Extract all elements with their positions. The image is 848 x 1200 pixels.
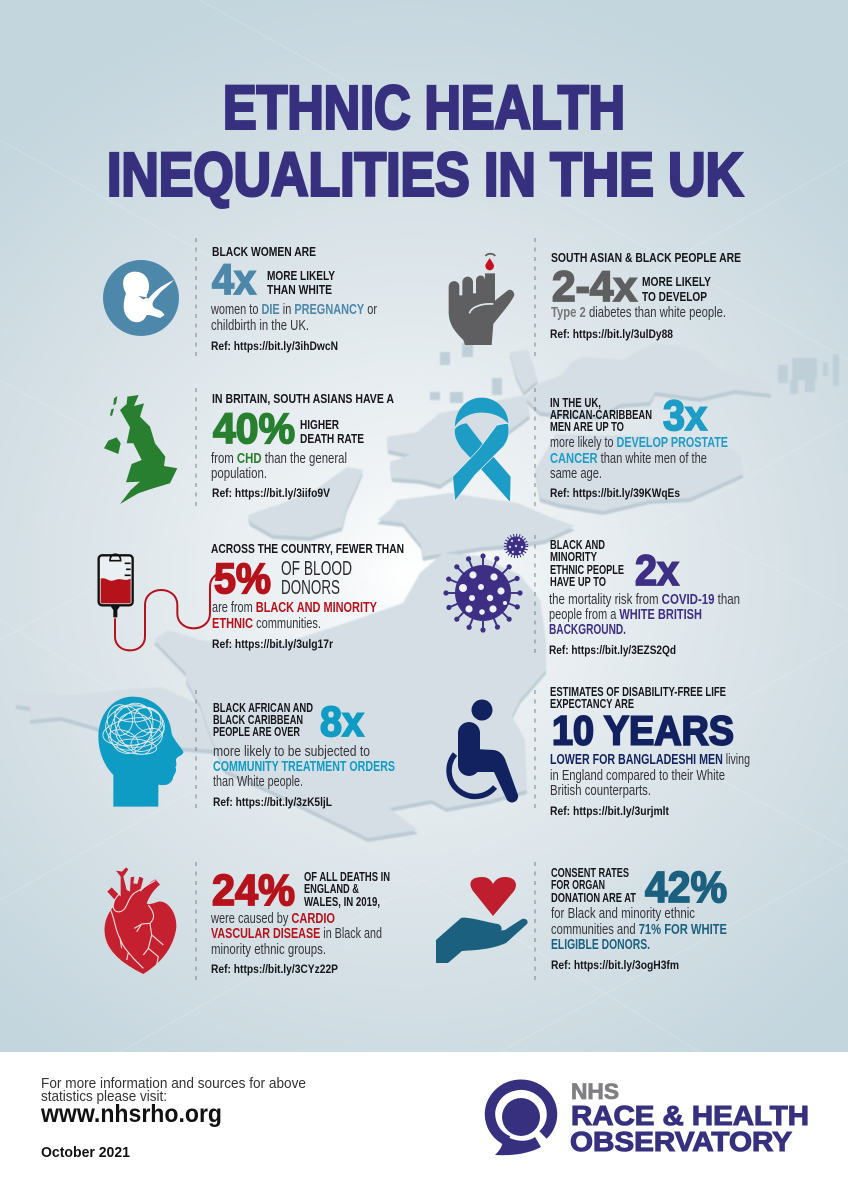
text: CHD [211, 391, 394, 500]
text: disability: in England compared to their White [550, 768, 725, 784]
panel: organ donation [436, 862, 727, 980]
footer text: For more information and sources for above [41, 1075, 306, 1092]
text: disability: British counterparts. [550, 783, 651, 799]
text: diabetes: Type 2 diabetes than white people. [551, 305, 726, 321]
text: covid: HAVE UP TO [550, 574, 606, 589]
panel: prostate cancer [453, 388, 728, 510]
text: diabetes: MORE LIKELY [642, 274, 711, 289]
text: covid [549, 537, 740, 657]
text: organ: FOR ORGAN [551, 877, 605, 892]
text: prostate: same age. [550, 466, 602, 482]
logo: NHS Race & Health Observatory: OBSERVATORY [570, 1126, 792, 1157]
icon: head with tangled thoughts [98, 696, 183, 807]
text: CTO: BLACK AFRICAN AND [213, 700, 313, 715]
footer text: www.nhsrho.org [40, 1100, 222, 1128]
text: cardio: WALES, IN 2019, [304, 894, 380, 909]
panel: covid-19 [443, 535, 740, 658]
text: cardio: 24% [212, 866, 295, 915]
text: disability: Ref: https://bit.ly/3urjmlt [550, 804, 669, 818]
text: donors: OF BLOOD [281, 558, 352, 580]
title: INEQUALITIES IN THE UK [107, 140, 743, 210]
text: prostate: more likely to DEVELOP PROSTATE [550, 435, 728, 451]
panel: community treatment orders [98, 690, 395, 812]
logo: NHS Race & Health Observatory [490, 1079, 809, 1157]
text: organ: for Black and minority ethnic [551, 906, 695, 922]
text: maternal: childbirth in the UK. [211, 318, 309, 334]
text: cardio: OF ALL DEATHS IN [304, 869, 390, 884]
text: organ: communities and 71% FOR WHITE [551, 922, 727, 938]
text: donors: Ref: https://bit.ly/3ulg17r [212, 637, 333, 651]
text: organ: 42% [645, 863, 727, 912]
text: CHD: DEATH RATE [300, 431, 364, 446]
panel: cardiovascular disease [105, 862, 390, 980]
text: covid: BLACK AND [550, 537, 605, 552]
text: donors [211, 541, 404, 651]
text: CTO: than White people. [213, 774, 303, 790]
text: cardio [210, 866, 390, 976]
text: CTO: Ref: https://bit.ly/3zK5ljL [213, 795, 332, 809]
text: CTO: COMMUNITY TREATMENT ORDERS [213, 759, 395, 775]
text: CHD: from CHD than the general [211, 451, 347, 467]
text: diabetes: SOUTH ASIAN & BLACK PEOPLE ARE [551, 250, 741, 265]
text: maternal: women to DIE in PREGNANCY or [210, 302, 377, 318]
icon: heart in hand [436, 877, 528, 963]
text: covid: ETHNIC PEOPLE [550, 562, 624, 577]
text: CTO: more likely to be subjected to [213, 744, 370, 760]
footer [0, 1052, 848, 1200]
text: CHD: 40% [213, 405, 295, 453]
text: diabetes: 2-4x [552, 263, 637, 311]
title [107, 74, 743, 210]
text: covid: MINORITY [550, 549, 597, 564]
icon: UK map [104, 395, 177, 504]
text: prostate [550, 392, 728, 500]
text: donors: DONORS [281, 577, 340, 599]
logo: NHS Race & Health Observatory: NHS [571, 1079, 619, 1104]
panel: disability-free life expectancy [449, 684, 750, 818]
text: prostate: AFRICAN-CARIBBEAN [550, 407, 652, 422]
text: maternal: 4x [212, 256, 256, 304]
text: maternal: BLACK WOMEN ARE [212, 244, 316, 259]
panel: CHD death rate [104, 388, 394, 510]
footer text: October 2021 [41, 1145, 130, 1161]
text: prostate: IN THE UK, [550, 395, 601, 410]
footer text: statistics please visit: [41, 1088, 167, 1105]
panel: maternal mortality [103, 238, 377, 358]
text: maternal [210, 244, 377, 353]
text: organ: ELIGIBLE DONORS. [551, 937, 650, 953]
text: covid: people from a WHITE BRITISH [549, 607, 702, 623]
text: disability [550, 684, 750, 818]
text: donors: ETHNIC communities. [212, 616, 321, 632]
icon: wheelchair user [449, 700, 518, 802]
icon: large virus [443, 553, 523, 633]
icon: awareness ribbon [453, 398, 511, 502]
text: donors: ACROSS THE COUNTRY, FEWER THAN [211, 541, 404, 556]
text: disability: ESTIMATES OF DISABILITY-FREE LIFE [550, 684, 726, 699]
text: covid: BACKGROUND. [549, 622, 626, 638]
text: cardio: Ref: https://bit.ly/3CYz22P [211, 962, 338, 976]
text: diabetes: Ref: https://bit.ly/3ulDy88 [550, 327, 673, 341]
text: disability: 10 YEARS [552, 708, 734, 754]
text: diabetes [550, 250, 741, 341]
icon: blood bag [99, 554, 219, 650]
text: diabetes: TO DEVELOP [642, 289, 707, 304]
text: cardio: minority ethnic groups. [211, 942, 326, 958]
text: donors: are from BLACK AND MINORITY [212, 600, 377, 616]
text: cardio: ENGLAND & [304, 881, 359, 896]
panel: blood donors [99, 541, 404, 651]
text: maternal: MORE LIKELY [267, 268, 335, 283]
text: cardio: VASCULAR DISEASE in Black and [211, 926, 382, 942]
text: CHD: population. [211, 466, 267, 482]
text: covid: the mortality risk from COVID-19 than [549, 592, 740, 608]
text: organ: DONATION ARE AT [551, 890, 636, 905]
text: disability: LOWER FOR BANGLADESHI MEN living [550, 752, 750, 768]
text: CTO: BLACK CARIBBEAN [213, 712, 303, 727]
text: covid: 2x [635, 547, 679, 595]
icon: hand with blood drop [449, 254, 514, 345]
text: CHD: IN BRITAIN, SOUTH ASIANS HAVE A [212, 391, 394, 406]
icon: anatomical heart [105, 867, 176, 974]
text: disability: EXPECTANCY ARE [550, 696, 634, 711]
text: organ [551, 863, 727, 972]
text: prostate: MEN ARE UP TO [550, 419, 624, 434]
title: ETHNIC HEALTH [223, 74, 625, 142]
text: organ: Ref: https://bit.ly/3ogH3fm [551, 958, 679, 972]
text: covid: Ref: https://bit.ly/3EZS2Qd [549, 643, 676, 657]
text: organ: CONSENT RATES [551, 865, 629, 880]
logo: NHS Race & Health Observatory: RACE & HEALTH [571, 1100, 809, 1131]
text: prostate: 3x [663, 392, 707, 440]
text: CTO: PEOPLE ARE OVER [213, 724, 300, 739]
icon: small virus [506, 536, 526, 556]
text: maternal: Ref: https://bit.ly/3ihDwcN [211, 339, 338, 353]
text: CHD: Ref: https://bit.ly/3iifo9V [212, 486, 331, 500]
text: donors: 5% [214, 555, 271, 603]
icon: fetus [103, 260, 179, 336]
text: CHD: HIGHER [300, 417, 339, 432]
text: CTO [213, 698, 395, 809]
text: maternal: THAN WHITE [267, 282, 332, 297]
text: CTO: 8x [320, 698, 364, 746]
footer text [40, 1075, 306, 1161]
text: prostate: Ref: https://bit.ly/39KWqEs [550, 486, 680, 500]
panel: type 2 diabetes [449, 238, 741, 358]
text: prostate: CANCER than white men of the [550, 451, 707, 467]
text: cardio: were caused by CARDIO [210, 911, 335, 927]
